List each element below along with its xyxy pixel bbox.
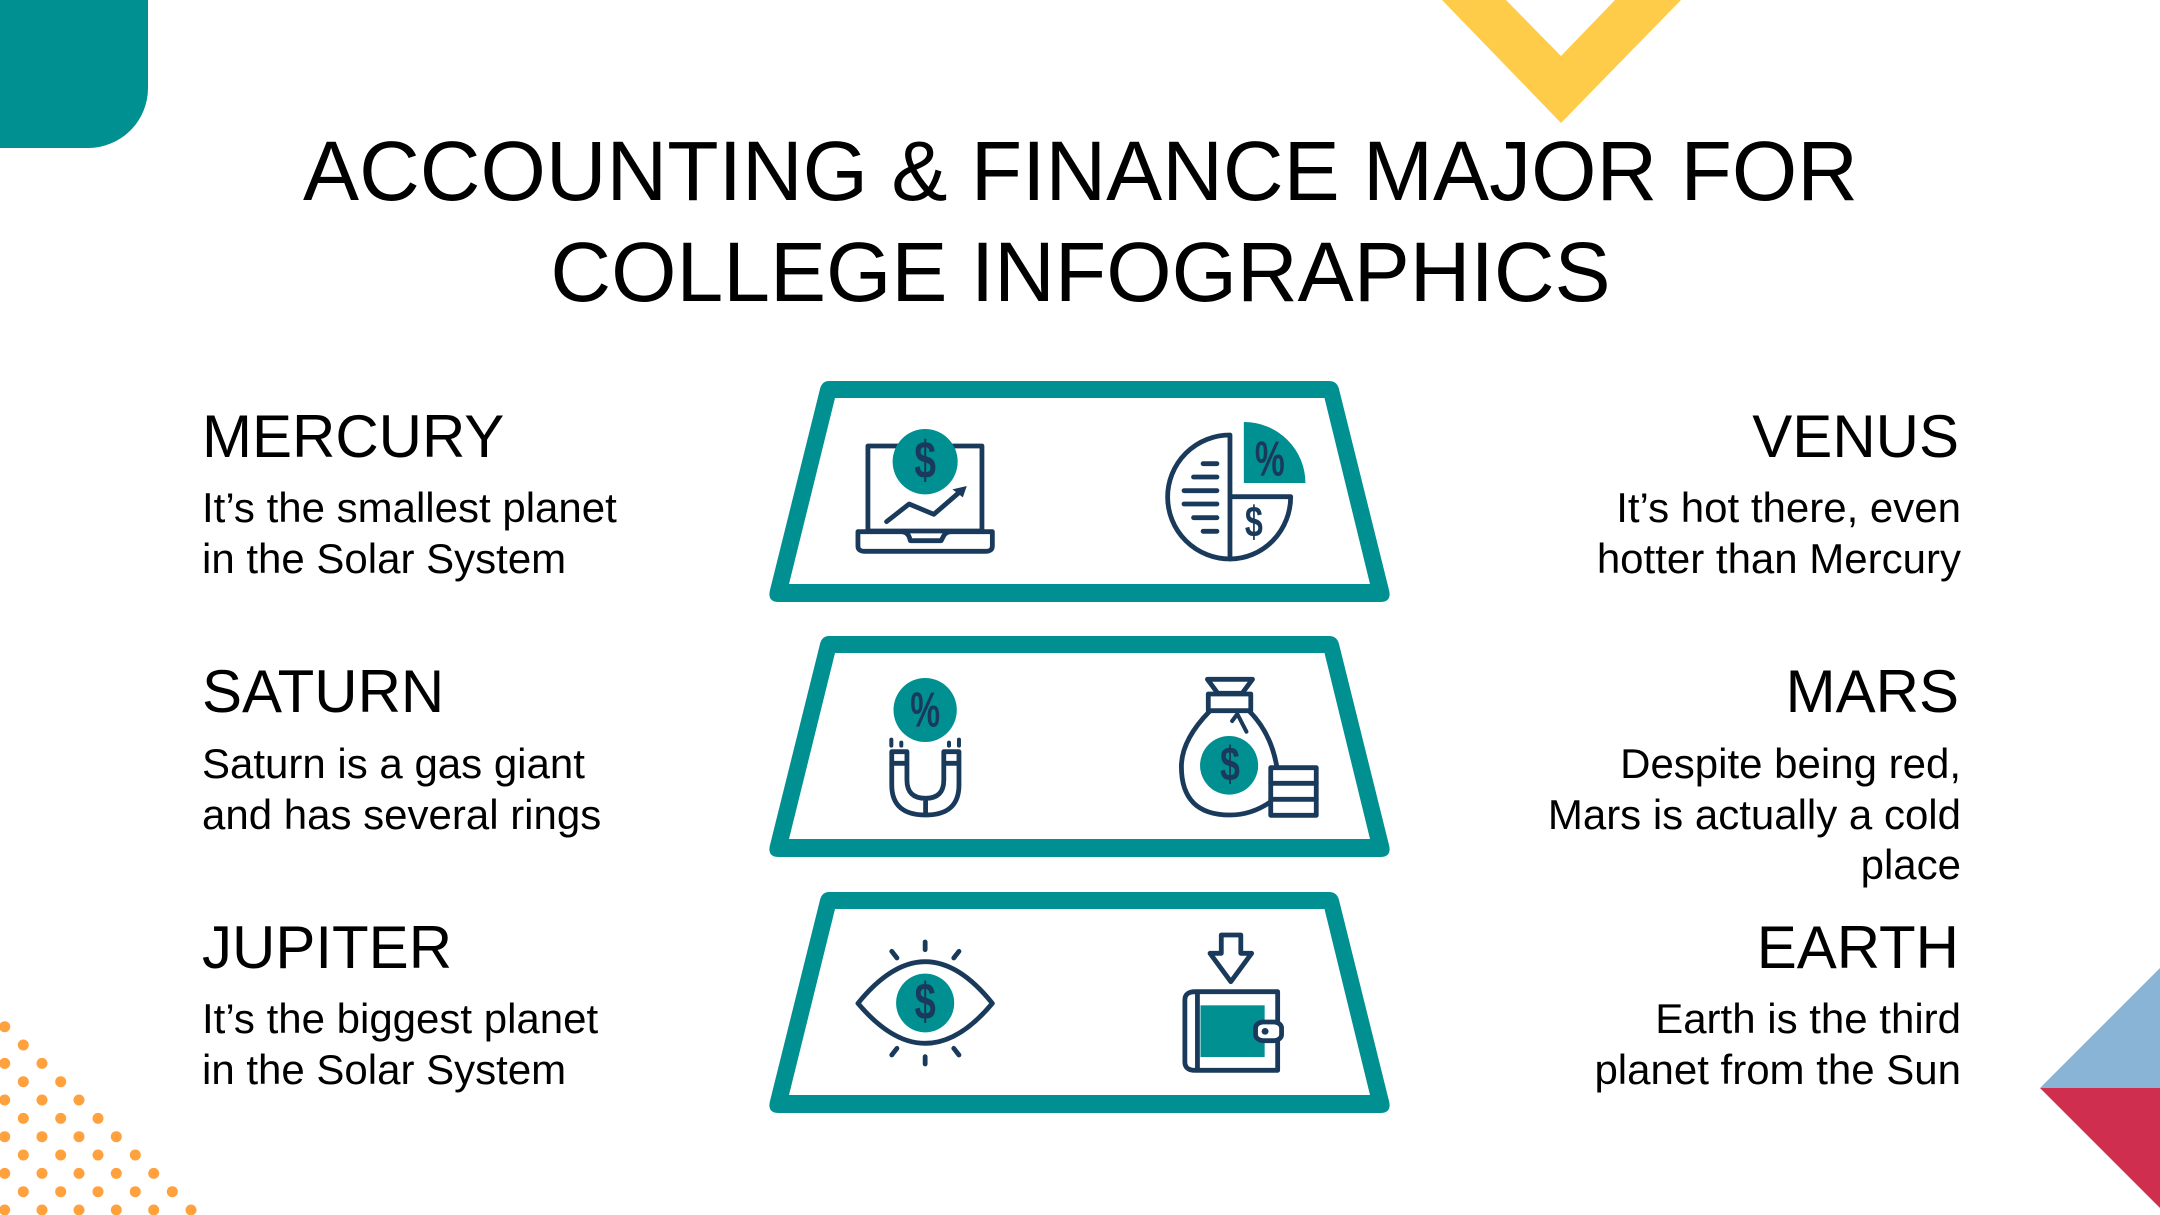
title: COLLEGE INFOGRAPHICS [550, 225, 1611, 319]
text block: Jupiter: JUPITER [202, 914, 452, 981]
text block: Jupiter: It’s the biggest planet [202, 995, 598, 1042]
icon: pie chart with percent and dollar: % [1255, 431, 1285, 486]
icon: laptop with dollar and rising chart [858, 429, 992, 551]
text block: Saturn [202, 658, 601, 838]
text block: Venus: VENUS [1752, 403, 1959, 470]
text block: Jupiter: in the Solar System [202, 1046, 566, 1092]
trapezoid frame: row 2 [769, 636, 1390, 857]
decoration: blue triangle [2040, 968, 2160, 1088]
text block: Earth: EARTH [1757, 914, 1959, 981]
text block: Saturn: and has several rings [202, 790, 601, 838]
text block: Venus: hotter than Mercury [1597, 534, 1961, 582]
text block: Earth: Earth is the third [1655, 995, 1961, 1042]
icon: eye with dollar [858, 942, 992, 1064]
text block: Venus: It’s hot there, even [1616, 484, 1961, 531]
decoration: teal corner [0, 0, 148, 148]
icon: laptop with dollar and rising chart: $ [914, 430, 936, 489]
icon: magnet attracting percent [891, 678, 959, 815]
icon: pie chart with percent and dollar [1168, 422, 1305, 559]
text block: Mercury [202, 403, 617, 582]
icon: money bag with coins [1181, 679, 1316, 815]
icon: eye with dollar: $ [915, 972, 936, 1030]
text block: Mars: place [1861, 841, 1961, 888]
text block: Saturn: SATURN [202, 658, 444, 725]
text block: Venus [1597, 403, 1961, 582]
text block: Mars [1548, 658, 1961, 888]
text block: Mars: Despite being red, [1620, 740, 1961, 787]
text block: Mars: Mars is actually a cold [1548, 790, 1961, 838]
trapezoid frame: row 1 [769, 381, 1390, 602]
text block: Mars: MARS [1786, 658, 1959, 725]
icon: pie chart with percent and dollar: $ [1245, 498, 1263, 547]
text block: Saturn: Saturn is a gas giant [202, 740, 585, 787]
decoration: yellow chevron [1442, 0, 1681, 123]
text block: Earth [1594, 914, 1961, 1092]
text block: Jupiter [202, 914, 598, 1092]
text block: Mercury: in the Solar System [202, 534, 566, 582]
icon: magnet attracting percent: % [910, 682, 940, 737]
icon: money bag with coins: $ [1220, 737, 1240, 791]
text block: Mercury: It’s the smallest planet [202, 484, 617, 531]
title: ACCOUNTING & FINANCE MAJOR FOR [303, 124, 1858, 218]
text block: Earth: planet from the Sun [1594, 1046, 1961, 1092]
decoration: red triangle [2040, 1088, 2160, 1208]
title [303, 124, 1858, 319]
icon: wallet with down arrow [1185, 935, 1282, 1070]
text block: Mercury: MERCURY [202, 403, 504, 470]
trapezoid frame: row 3 [769, 892, 1390, 1113]
decoration: orange dots [0, 1021, 197, 1215]
